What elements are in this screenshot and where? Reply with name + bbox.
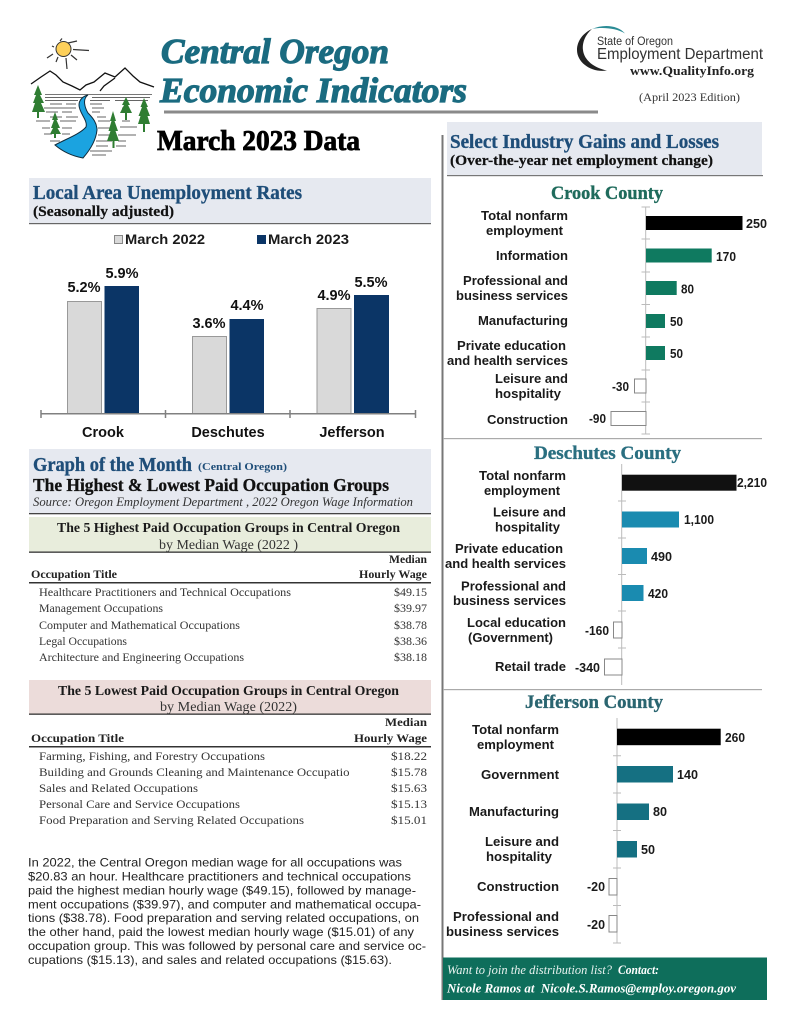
bar chart: Deschutes County: Leisure and [493, 504, 566, 520]
bar chart: unemployment rates: Deschutes [191, 425, 265, 441]
bar chart: Jefferson County: -20 [587, 918, 605, 932]
bar chart: Crook County: Professional and [463, 273, 568, 288]
table: 5 lowest paid occupation groups: $15.13 [391, 797, 427, 811]
legend: March 2023 [268, 231, 349, 247]
bar chart: Deschutes County: -340 [575, 661, 600, 675]
table: 5 highest paid occupation groups: Computer and Mathematical Occupations [39, 618, 240, 632]
text block: wage summary: In 2022, the Central Oregon median wage for all occupations was [28, 856, 402, 870]
heading: graph of the month: The Highest & Lowest Paid Occupation Groups [33, 475, 389, 495]
table: 5 highest paid occupation groups: $38.36 [394, 634, 427, 648]
icon: Employment Department logo: Employment Department [597, 46, 764, 63]
heading: Jefferson County: Jefferson County [525, 692, 663, 713]
table: 5 lowest paid occupation groups: by Median Wage (2022) [160, 700, 297, 715]
text block: wage summary: tions ($38.78). Food preparation and serving related occupations, on [28, 911, 419, 925]
bar chart: Jefferson County: business services [446, 924, 559, 939]
title [159, 32, 467, 110]
table: 5 highest paid occupation groups: $49.15 [394, 585, 427, 599]
table: 5 highest paid occupation groups: Legal Occupations [39, 634, 127, 648]
bar chart: Crook County: and health services [447, 353, 568, 368]
bar chart: Crook County: Leisure and [495, 371, 568, 386]
section divider [443, 689, 762, 690]
bar chart: Crook County: business services [456, 288, 568, 303]
title underline rule [164, 110, 598, 114]
bar chart: Jefferson County: hospitality [486, 849, 553, 864]
bar chart: Crook County: 80 [681, 282, 694, 296]
table: 5 lowest paid occupation groups: The 5 Lowest Paid Occupation Groups in Central Oregon [58, 684, 399, 699]
bar chart: Crook County: Information [496, 248, 568, 263]
table: 5 highest paid occupation groups: $38.78 [394, 618, 427, 632]
table: 5 highest paid occupation groups: Architecture and Engineering Occupations [39, 650, 244, 664]
bar chart: Deschutes County: business services [453, 593, 566, 608]
bar chart: Deschutes County: Local education [467, 615, 566, 630]
bar chart: Deschutes County: hospitality [495, 520, 561, 534]
bar chart: Crook County: Construction [487, 412, 568, 427]
heading: unemployment rates [29, 178, 431, 224]
bar chart: Jefferson County: employment [477, 737, 555, 752]
table: 5 highest paid occupation groups: Occupation Title [31, 567, 118, 581]
bar chart: Deschutes County: Private education [455, 541, 563, 556]
table: 5 highest paid occupation groups: The 5 Highest Paid Occupation Groups in Central Oregon [57, 521, 400, 536]
callout: distribution list contact [443, 958, 767, 1000]
edition note: (April 2023 Edition) [639, 90, 740, 104]
bar chart: Deschutes County: Professional and [461, 578, 566, 594]
heading: graph of the month: Graph of the Month [33, 454, 192, 476]
bar chart: unemployment rates: 4.4% [230, 298, 264, 314]
bar chart: Deschutes County: (Government) [468, 630, 553, 645]
icon: Employment Department logo: State of Oregon [597, 36, 673, 48]
callout: distribution list contact: Contact: [618, 962, 659, 977]
bar chart: unemployment rates: Crook [82, 425, 125, 441]
text block: wage summary: paid the highest median hourly wage ($49.15), followed by manage- [28, 884, 416, 898]
bar chart: unemployment rates: Jefferson [319, 425, 385, 441]
bar chart: Crook County: Total nonfarm [481, 208, 568, 223]
bar chart: unemployment rates: 5.5% [354, 275, 388, 291]
bar chart: unemployment rates [41, 266, 416, 441]
table: 5 lowest paid occupation groups: $15.78 [391, 765, 427, 779]
bar chart: Deschutes County: Total nonfarm [479, 468, 566, 483]
table: 5 highest paid occupation groups: by Median Wage (2022 ) [159, 538, 298, 553]
bar chart: Deschutes County: 490 [651, 550, 672, 564]
bar chart: unemployment rates: 4.9% [317, 288, 351, 304]
bar chart: Crook County [447, 207, 767, 434]
bar chart: Jefferson County: 80 [653, 805, 667, 819]
bar chart: Deschutes County: -160 [585, 624, 609, 638]
title: Central Oregon [161, 32, 389, 71]
legend [114, 231, 349, 247]
bar chart: Jefferson County: 50 [641, 843, 655, 857]
bar chart: Crook County: employment [486, 223, 564, 238]
bar chart: unemployment rates: 5.2% [67, 280, 101, 296]
bar chart: Jefferson County: -20 [587, 880, 605, 894]
section divider [443, 438, 762, 439]
panel: Deschutes County [445, 443, 767, 685]
bar chart: Jefferson County: Manufacturing [469, 804, 559, 819]
text block: wage summary: the other hand, paid the lowest median hourly wage ($15.01) of any [28, 925, 414, 939]
table: 5 highest paid occupation groups [29, 517, 431, 664]
text block: wage summary: $20.83 an hour. Healthcare practitioners and technical occupations [28, 870, 411, 884]
bar chart: Crook County: 250 [746, 217, 767, 231]
table: 5 lowest paid occupation groups: Median [385, 715, 427, 729]
table: 5 highest paid occupation groups: Median [389, 552, 427, 566]
legend: March 2022 [125, 231, 205, 247]
bar chart: Jefferson County: Total nonfarm [472, 722, 559, 737]
bar chart: Deschutes County: Retail trade [495, 659, 566, 674]
table: 5 highest paid occupation groups: Healthcare Practitioners and Technical Occupations [39, 585, 291, 599]
table: 5 lowest paid occupation groups: $18.22 [391, 749, 427, 763]
bar chart: Crook County: Manufacturing [478, 313, 568, 328]
table: 5 highest paid occupation groups: Management Occupations [39, 601, 163, 615]
text block: wage summary: occupation group. This was followed by personal care and service oc- [28, 939, 426, 953]
bar chart: unemployment rates: 5.9% [105, 266, 139, 282]
bar chart: Deschutes County: and health services [445, 556, 566, 571]
bar chart: Crook County: 50 [670, 347, 683, 361]
bar chart: Jefferson County: Construction [477, 879, 559, 894]
table: 5 lowest paid occupation groups: Food Preparation and Serving Related Occupations [39, 813, 304, 827]
bar chart: Jefferson County: 140 [677, 768, 698, 782]
callout: distribution list contact: Nicole Ramos at Nicole.S.Ramos@employ.oregon.gov [446, 980, 736, 996]
icon: Employment Department logo [577, 26, 764, 71]
panel: unemployment rates [29, 178, 431, 441]
bar chart: Crook County: hospitality [495, 386, 562, 401]
bar chart: Jefferson County: Leisure and [485, 834, 559, 849]
bar chart: Jefferson County: Government [481, 767, 560, 782]
heading: unemployment rates: (Seasonally adjusted) [33, 204, 174, 220]
heading: unemployment rates: Local Area Unemployment Rates [33, 182, 302, 204]
heading: select industry gains and losses: Select Industry Gains and Losses [450, 131, 719, 153]
heading: select industry gains and losses: (Over-the-year net employment change) [450, 153, 713, 169]
heading: graph of the month: Source: Oregon Employment Department , 2022 Oregon Wage Information [33, 494, 413, 509]
date heading: March 2023 Data [157, 126, 360, 157]
text block: wage summary [28, 856, 426, 967]
heading: Crook County: Crook County [551, 183, 663, 204]
heading: select industry gains and losses [447, 122, 763, 176]
bar chart: Crook County: 50 [670, 315, 683, 329]
table: 5 lowest paid occupation groups: Occupation Title [31, 731, 125, 745]
bar chart: Crook County: -90 [589, 412, 606, 426]
bar chart: Crook County: 170 [716, 250, 736, 264]
website url: www.QualityInfo.org [630, 63, 755, 78]
bar chart: Jefferson County [446, 718, 745, 943]
title: Economic Indicators [159, 71, 467, 110]
heading: graph of the month: (Central Oregon) [198, 461, 287, 473]
table: 5 lowest paid occupation groups: Farming, Fishing, and Forestry Occupations [39, 749, 265, 763]
text block: wage summary: ment occupations ($39.97), and computer and mathematical occupa- [28, 898, 421, 912]
bar chart: Deschutes County: 420 [648, 587, 668, 601]
callout: distribution list contact: Want to join the distribution list? [447, 962, 612, 977]
table: 5 lowest paid occupation groups: Personal Care and Service Occupations [39, 797, 240, 811]
table: 5 lowest paid occupation groups: Hourly Wage [354, 731, 428, 745]
panel: Crook County [447, 183, 767, 434]
bar chart: Crook County: Private education [457, 338, 566, 353]
table: 5 highest paid occupation groups: $39.97 [394, 601, 427, 615]
bar chart: Deschutes County: 1,100 [684, 513, 714, 527]
panel: graph of the month [29, 449, 431, 827]
table: 5 highest paid occupation groups: $38.18 [394, 650, 427, 664]
table: 5 lowest paid occupation groups: Building and Grounds Cleaning and Maintenance Occupation [39, 765, 356, 779]
table: 5 lowest paid occupation groups [29, 680, 431, 827]
text block: wage summary: cupations ($15.13), and sales and related occupations ($15.63). [28, 953, 392, 967]
bar chart: Deschutes County: employment [484, 483, 561, 498]
bar chart: Crook County: -30 [612, 380, 629, 394]
bar chart: unemployment rates: 3.6% [192, 316, 226, 332]
table: 5 lowest paid occupation groups: Sales and Related Occupations [39, 781, 198, 795]
heading: graph of the month [29, 449, 431, 514]
heading: Deschutes County: Deschutes County [534, 443, 682, 464]
panel: Jefferson County [446, 692, 745, 943]
icon: Central Oregon landscape logo [31, 38, 154, 158]
table: 5 highest paid occupation groups: Hourly Wage [359, 567, 428, 581]
bar chart: Jefferson County: 260 [725, 731, 745, 745]
bar chart: Deschutes County [445, 464, 767, 685]
column divider [442, 135, 444, 1000]
table: 5 lowest paid occupation groups: $15.63 [391, 781, 427, 795]
table: 5 lowest paid occupation groups: $15.01 [391, 813, 427, 827]
bar chart: Deschutes County: 2,210 [737, 476, 767, 490]
bar chart: Jefferson County: Professional and [453, 909, 559, 924]
